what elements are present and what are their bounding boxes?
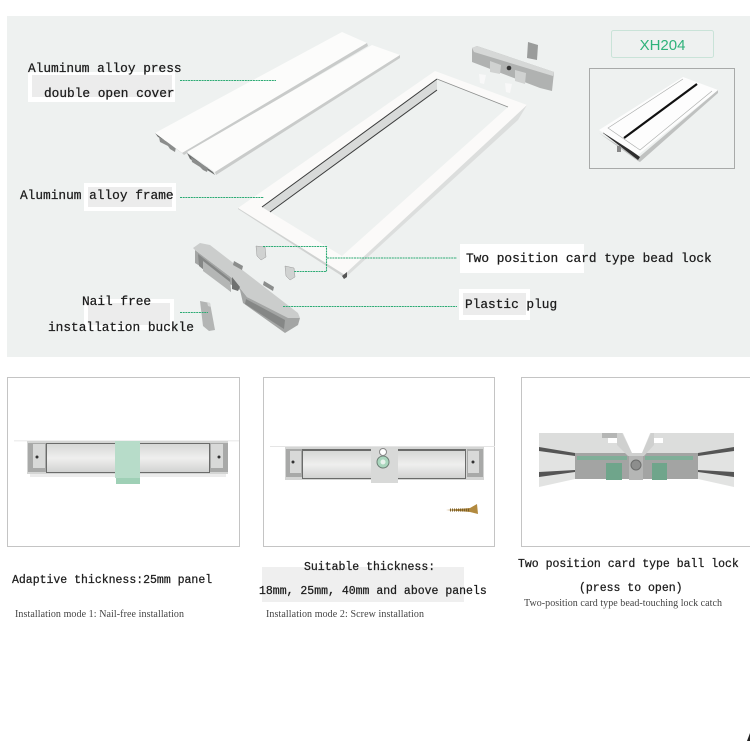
label: bead lock: Two position card type bead lock: [466, 251, 712, 266]
assembled product inset: [590, 68, 734, 168]
aluminum cover: [155, 32, 400, 175]
icon: screw: [446, 504, 478, 514]
panel 2 title: Suitable thickness:: [304, 561, 435, 574]
label: cover line 2: double open cover: [44, 86, 175, 101]
panel: ball lock: [522, 378, 750, 546]
panel: screw installation: [264, 378, 495, 546]
label: buckle: Nail free: [82, 294, 151, 309]
lock pieces, lower: [256, 246, 295, 280]
panel: nail-free installation: [8, 378, 240, 546]
label backdrops: [28, 72, 584, 330]
plastic plug and locks, upper: [472, 42, 554, 93]
nail free buckle: [200, 301, 215, 331]
panel 1 caption: Installation mode 1: Nail-free installation: [15, 609, 184, 620]
lock diagram: [539, 431, 734, 487]
panel 1 title: Adaptive thickness:25mm panel: [12, 574, 212, 587]
label: buckle line 2: installation buckle: [48, 320, 194, 335]
panel 3 caption: Two-position card type bead-touching lock catch: [524, 598, 722, 609]
corner page mark: [747, 733, 750, 741]
plastic plug, lower: [193, 243, 300, 333]
label: frame: Aluminum alloy frame: [20, 188, 174, 203]
aluminum frame: [238, 71, 527, 279]
panel 3 title: Two position card type ball lock: [518, 558, 739, 571]
panel: exploded view: [7, 16, 750, 357]
section diagram: [270, 446, 495, 483]
panel 2 title backdrop: [262, 567, 464, 602]
leader lines: [180, 80, 457, 312]
panel 2 title line 2: 18mm, 25mm, 40mm and above panels: [259, 585, 487, 598]
panel 3 title line 2: (press to open): [579, 582, 683, 595]
label: plastic plug: Plastic plug: [465, 297, 557, 312]
section diagram: [14, 440, 239, 484]
model badge: [612, 30, 714, 58]
model badge: XH204: [640, 37, 685, 54]
panel 2 caption: Installation mode 2: Screw installation: [266, 609, 424, 620]
label: cover: Aluminum alloy press: [28, 61, 182, 76]
